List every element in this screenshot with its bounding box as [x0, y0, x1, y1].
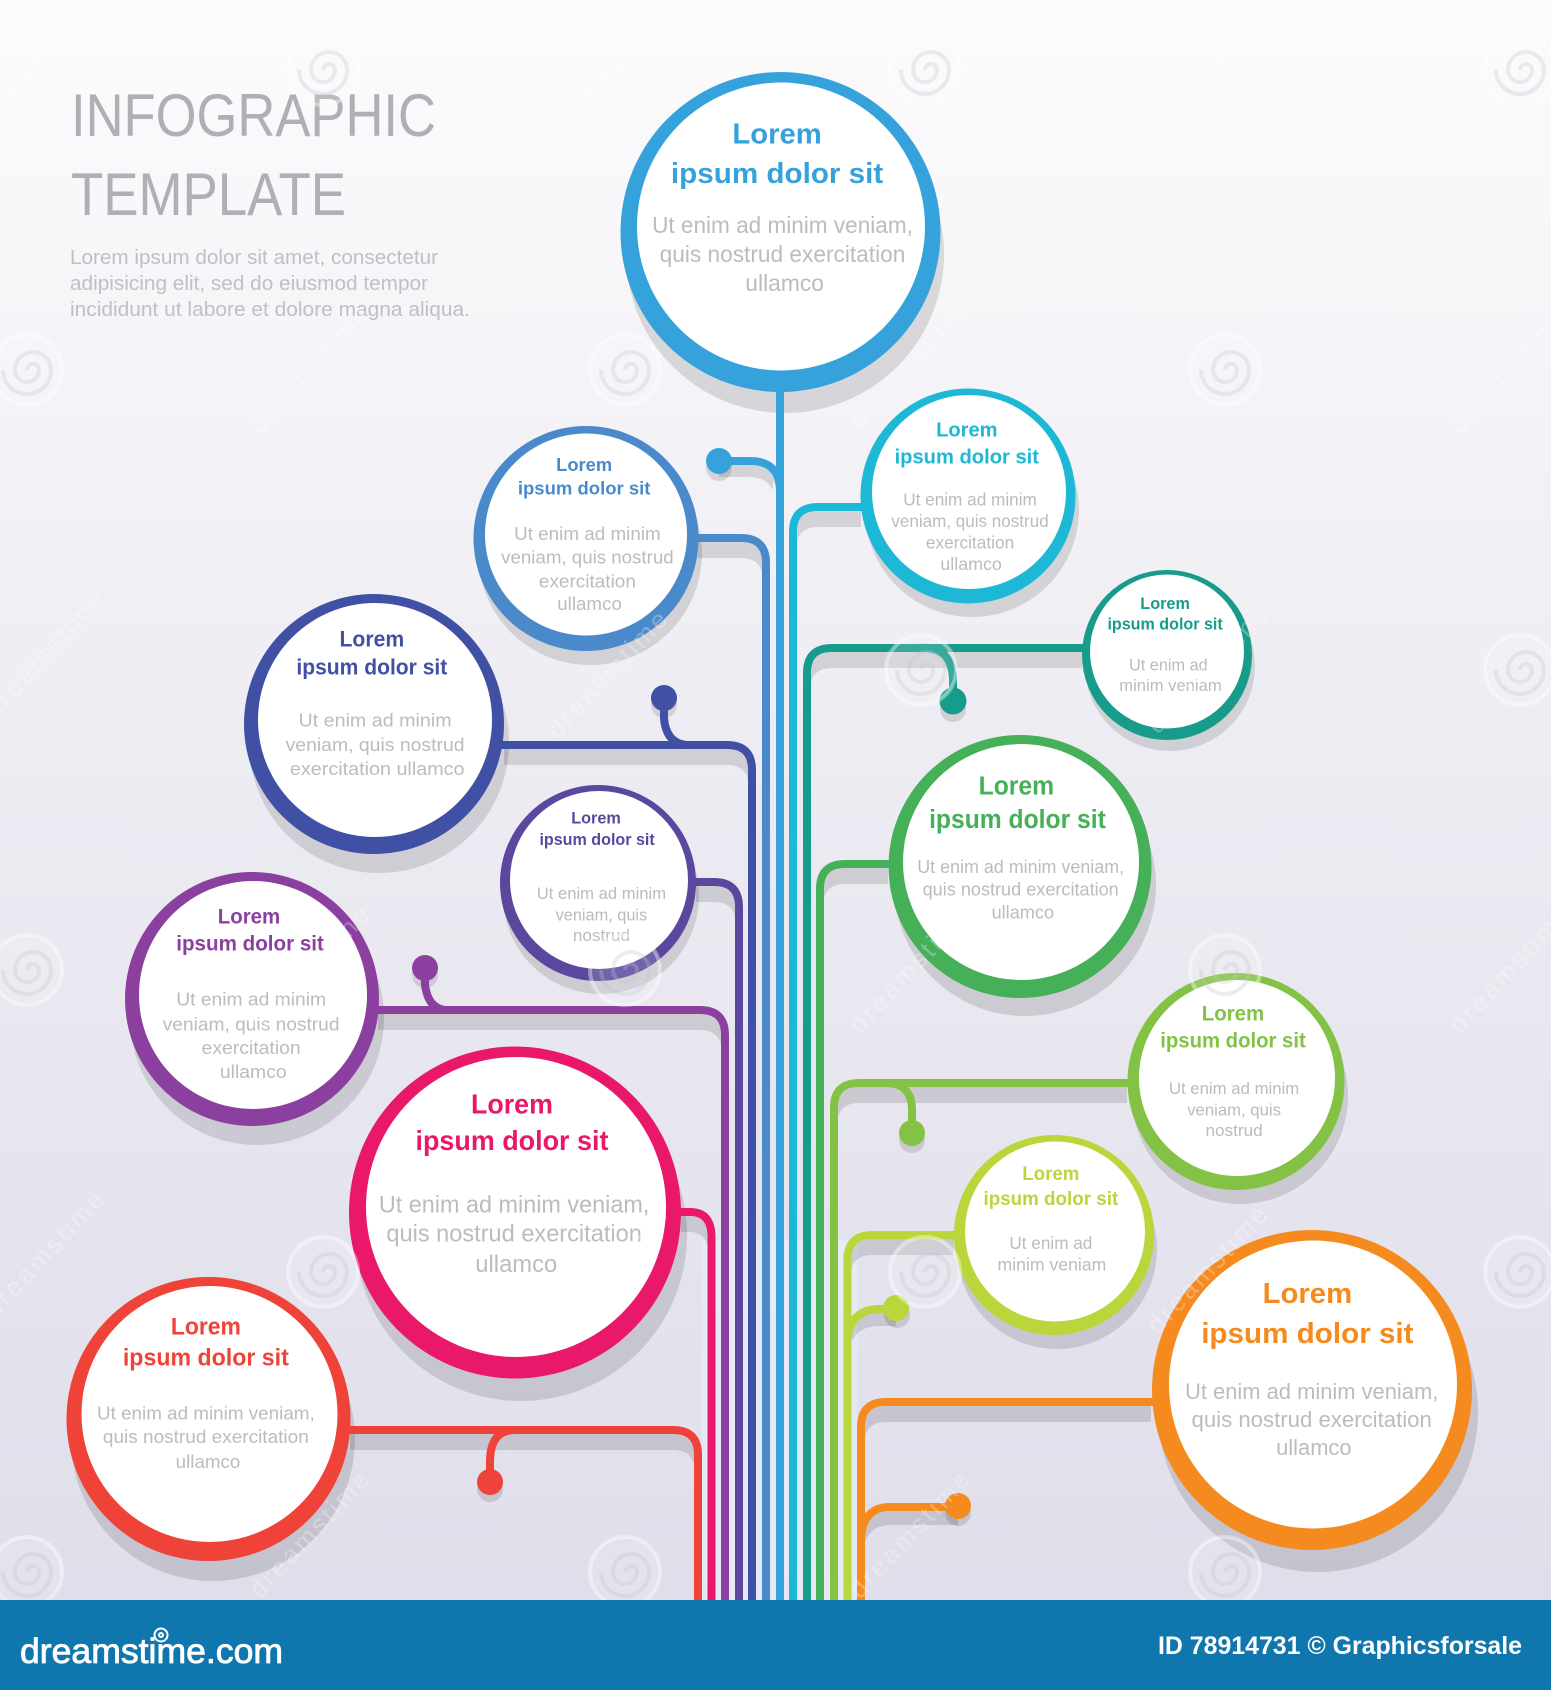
- watermark text: dreamstime: [242, 297, 377, 439]
- intro text: Lorem ipsum dolor sit amet, consectetur: [70, 246, 438, 269]
- node: light green: veniam, quis: [1187, 1101, 1281, 1120]
- node: violet: ipsum dolor sit: [539, 830, 655, 849]
- node: indigo: [244, 594, 504, 854]
- node: violet: veniam, quis: [556, 906, 647, 924]
- footer logo: dreamstime.com: [20, 1632, 283, 1671]
- node: red: quis nostrud exercitation: [103, 1426, 309, 1447]
- node: pink: Lorem: [471, 1088, 553, 1119]
- node: teal: Ut enim ad: [1129, 656, 1208, 674]
- watermark text: dreamstime: [842, 1462, 977, 1604]
- node: green: [888, 735, 1152, 998]
- watermark text: dreamstime: [540, 1197, 675, 1339]
- node: light green: nostrud: [1206, 1121, 1263, 1140]
- title: [71, 82, 436, 228]
- node: orange: [1152, 1230, 1472, 1550]
- node: pink: [349, 1046, 681, 1378]
- node: light green: Ut enim ad minim: [1169, 1079, 1299, 1098]
- node: indigo: veniam, quis nostrud: [286, 734, 465, 755]
- node: teal: ipsum dolor sit: [1107, 614, 1223, 633]
- node: purple: ullamco: [220, 1061, 287, 1082]
- footer bar: [0, 1600, 1551, 1690]
- node: blue: Ut enim ad minim: [514, 523, 661, 544]
- node: red: Ut enim ad minim veniam,: [97, 1402, 315, 1423]
- node: blue: [474, 426, 698, 651]
- node: purple: [125, 872, 379, 1126]
- node: pink: ipsum dolor sit: [415, 1125, 608, 1156]
- node: orange: Ut enim ad minim veniam,: [1185, 1379, 1438, 1404]
- node: purple: Lorem: [218, 904, 280, 929]
- node: violet: Lorem: [571, 808, 621, 827]
- node: orange: ullamco: [1276, 1435, 1352, 1460]
- node: cyan: exercitation: [926, 533, 1014, 553]
- connector: light green: [834, 1083, 1131, 1600]
- connector: purple: [375, 955, 725, 1600]
- watermark text: dreamstime: [1140, 0, 1275, 139]
- circle drop shadows: [71, 95, 1478, 1581]
- node: indigo: Lorem: [340, 627, 404, 652]
- node: lime: minim veniam: [998, 1255, 1106, 1275]
- footer credit: ID 78914731 © Graphicsforsale: [1158, 1632, 1522, 1660]
- node: red: Lorem: [171, 1314, 241, 1340]
- node: orange: Lorem: [1263, 1278, 1352, 1310]
- node: lime: Ut enim ad: [1009, 1233, 1092, 1253]
- node: lime: Lorem: [1022, 1163, 1079, 1185]
- node: green: Lorem: [979, 772, 1054, 800]
- node: blue: veniam, quis nostrud: [501, 547, 674, 568]
- node: blue: ullamco: [557, 593, 622, 614]
- watermark text: dreamstime: [1140, 597, 1275, 739]
- node: pink: Ut enim ad minim veniam,: [379, 1193, 649, 1219]
- watermark text: dreamstime: [842, 897, 977, 1039]
- title: INFOGRAPHIC: [71, 82, 436, 149]
- node: top sky blue: quis nostrud exercitation: [660, 241, 905, 267]
- watermark text: dreamstime: [1140, 1197, 1275, 1339]
- intro text: adipisicing elit, sed do eiusmod tempor: [70, 272, 428, 295]
- node: teal: Lorem: [1140, 594, 1190, 613]
- connector: green: [820, 864, 892, 1600]
- node: purple: veniam, quis nostrud: [163, 1013, 340, 1034]
- node: top sky blue: ipsum dolor sit: [671, 158, 884, 190]
- node: teal: [1082, 570, 1252, 740]
- node: orange: quis nostrud exercitation: [1192, 1407, 1432, 1432]
- node: purple: ipsum dolor sit: [176, 931, 324, 956]
- light glow behind vertical lines: [702, 1240, 857, 1600]
- node: purple: Ut enim ad minim: [176, 989, 326, 1010]
- node: violet: nostrud: [573, 927, 630, 945]
- node: indigo: exercitation ullamco: [290, 758, 465, 779]
- node: teal: minim veniam: [1119, 677, 1222, 695]
- node: cyan: ullamco: [940, 554, 1002, 574]
- node: purple: exercitation: [202, 1037, 301, 1058]
- node: light green: [1128, 973, 1344, 1190]
- connector: indigo: [500, 685, 752, 1600]
- connector: sky stem: [706, 385, 780, 1600]
- node: pink: ullamco: [475, 1252, 557, 1278]
- node: cyan: [860, 388, 1076, 604]
- node: light green: ipsum dolor sit: [1160, 1028, 1306, 1053]
- node: light green: Lorem: [1202, 1001, 1264, 1026]
- node: cyan: veniam, quis nostrud: [891, 511, 1049, 531]
- node: orange: ipsum dolor sit: [1201, 1318, 1414, 1350]
- node: lime: [954, 1135, 1154, 1335]
- intro text: [70, 246, 470, 321]
- connector: red: [345, 1430, 698, 1600]
- watermark text: dreamstime: [842, 292, 977, 434]
- node: green: ullamco: [992, 901, 1054, 922]
- intro text: incididunt ut labore et dolore magna aliqua.: [70, 298, 470, 321]
- node: violet: Ut enim ad minim: [537, 885, 666, 903]
- watermark text: dreamstime: [242, 1462, 377, 1604]
- connector: blue: [694, 538, 766, 1600]
- connector shadows: [350, 455, 1151, 1542]
- watermark text: dreamstime: [242, 897, 377, 1039]
- watermark text: dreamstime: [540, 602, 675, 744]
- node: blue: ipsum dolor sit: [518, 478, 651, 499]
- node: pink: quis nostrud exercitation: [386, 1222, 642, 1248]
- node: top sky blue: Ut enim ad minim veniam,: [652, 212, 913, 238]
- node: red: ullamco: [176, 1451, 240, 1472]
- connector: lime: [848, 1235, 958, 1600]
- node: indigo: Ut enim ad minim: [299, 709, 452, 730]
- node: lime: ipsum dolor sit: [983, 1188, 1119, 1210]
- watermark text: dreamstime: [540, 2, 675, 144]
- node: blue: exercitation: [539, 570, 636, 591]
- connector: teal: [807, 648, 1086, 1600]
- connector: pink: [675, 1212, 712, 1600]
- connector: cyan: [793, 507, 865, 1600]
- node: cyan: Lorem: [936, 419, 998, 442]
- node: green: Ut enim ad minim veniam,: [917, 856, 1124, 877]
- node: cyan: ipsum dolor sit: [895, 445, 1039, 468]
- node: cyan: Ut enim ad minim: [903, 489, 1037, 509]
- connector: orange: [861, 1402, 1155, 1600]
- node: top sky blue: [620, 72, 940, 392]
- node: green: ipsum dolor sit: [929, 806, 1106, 834]
- connector: violet: [692, 882, 739, 1600]
- node: red: [66, 1277, 350, 1561]
- node: indigo: ipsum dolor sit: [296, 655, 448, 680]
- title: TEMPLATE: [71, 161, 346, 228]
- node: top sky blue: Lorem: [732, 118, 822, 150]
- node: red: ipsum dolor sit: [123, 1346, 289, 1372]
- node: blue: Lorem: [556, 454, 612, 475]
- node: violet: [500, 785, 696, 981]
- node: top sky blue: ullamco: [745, 270, 824, 296]
- node: green: quis nostrud exercitation: [923, 879, 1119, 900]
